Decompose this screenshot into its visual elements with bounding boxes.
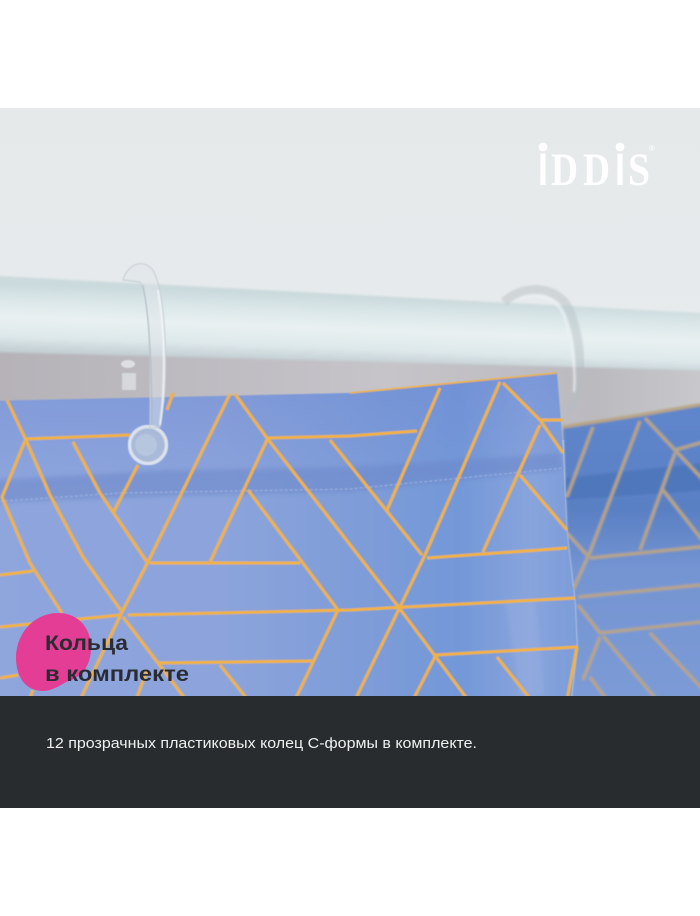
eyelet on curtain [130,426,166,464]
logo: IDDIS: S [628,144,650,196]
shadow area under the rod [0,345,700,440]
curtain geometric pattern [0,373,577,700]
badge heading: Кольца [45,632,128,655]
pink blob badge [16,613,91,691]
transparent ring left [123,264,166,428]
transparent ring right [504,289,580,412]
back curtain panel [563,402,700,710]
ring hook behind rod shadow [121,360,136,390]
fold highlight [505,600,545,696]
hem stitch line [0,468,563,502]
logo: IDDIS: I [538,144,548,195]
logo: IDDIS: D [583,144,610,196]
logo: IDDIS: I [615,144,625,195]
badge heading: в комплекте [45,663,189,686]
dark caption band [0,696,700,808]
logo: IDDIS: ® [649,144,655,153]
back curtain pattern [563,403,700,700]
wall background [0,108,700,698]
logo: IDDIS: D [551,144,578,196]
curtain rod [0,276,700,370]
logo: IDDIS [538,143,655,196]
badge heading [45,632,189,686]
caption text: 12 прозрачных пластиковых колец С-формы в комплекте. [46,736,477,752]
front curtain panel [0,373,577,710]
hem stitched band [0,453,563,503]
